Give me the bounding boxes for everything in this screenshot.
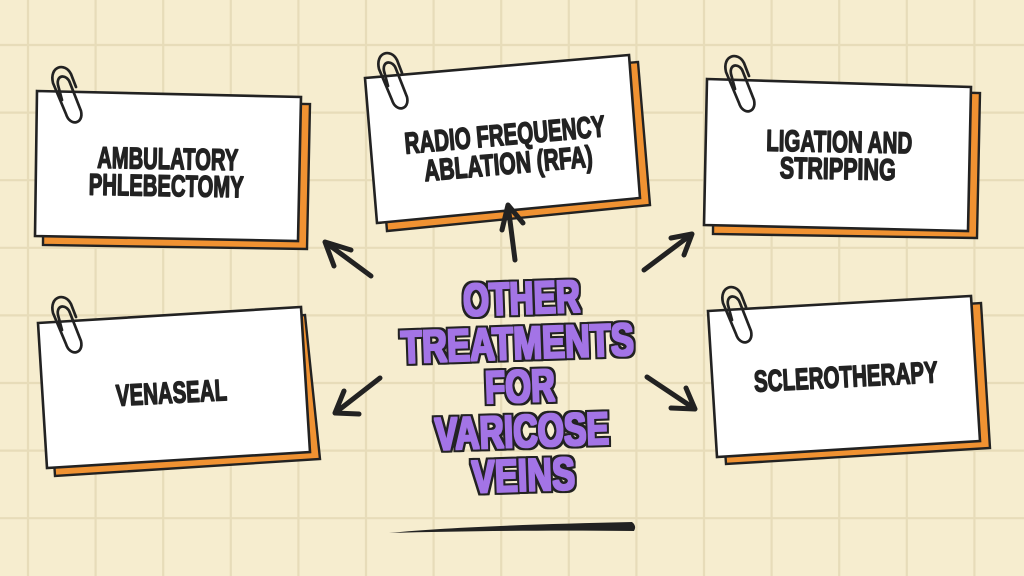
label: sclerotherapy: SCLEROTHERAPY (753, 356, 939, 399)
icon: paperclip (378, 53, 407, 108)
label: radio frequency ablation: RADIO FREQUENCY (403, 110, 606, 161)
title: OTHER (462, 270, 581, 326)
title (400, 270, 635, 503)
label: venaseal: VENASEAL (115, 374, 228, 413)
icon: paperclip (722, 287, 751, 342)
label: radio frequency ablation: ABLATION (RFA) (423, 140, 594, 188)
arrow: to radio frequency ablation (502, 205, 523, 260)
arrow: to sclerotherapy (647, 377, 695, 409)
panel: ambulatory phlebectomy (35, 67, 310, 249)
title: VARICOSE (434, 402, 610, 460)
label: ligation and stripping: LIGATION AND (766, 125, 912, 160)
label: radio frequency ablation (403, 110, 609, 190)
arrow: to ligation and stripping (644, 234, 692, 270)
label: ligation and stripping (765, 125, 912, 187)
arrow: to ambulatory phlebectomy (325, 242, 371, 276)
title: FOR (484, 359, 556, 413)
label: ambulatory phlebectomy (88, 142, 244, 204)
label: ambulatory phlebectomy: PHLEBECTOMY (88, 169, 244, 204)
label: ambulatory phlebectomy: AMBULATORY (97, 142, 238, 177)
label: ligation and stripping: STRIPPING (779, 152, 896, 187)
underline brush stroke (389, 522, 635, 533)
icon: paperclip (52, 297, 81, 352)
panel: radio frequency ablation (365, 53, 650, 231)
title: VEINS (471, 447, 576, 503)
panel: venaseal (38, 297, 320, 476)
panel: sclerotherapy (708, 287, 990, 464)
title: TREATMENTS (400, 313, 635, 373)
arrow: to venaseal (335, 378, 380, 414)
icon: paperclip (52, 67, 81, 122)
icon: paperclip (725, 56, 754, 111)
panel: ligation and stripping (704, 56, 980, 238)
